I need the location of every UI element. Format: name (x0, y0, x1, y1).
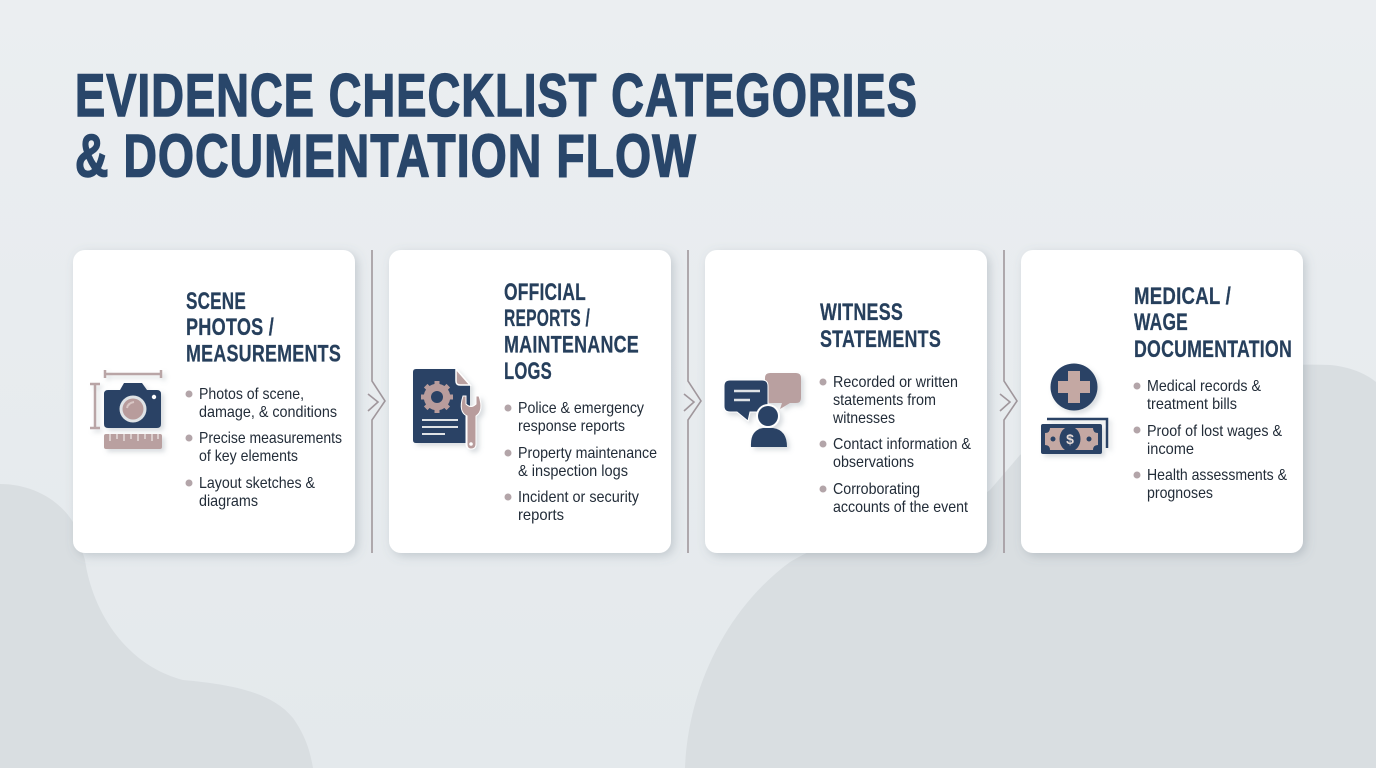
icon: document with gear and wrench (413, 369, 481, 449)
bullet list: & inspection logs (518, 463, 628, 480)
arrow: step 2 to 3 (684, 250, 701, 553)
bullet list (504, 400, 657, 524)
bullet list: Recorded or written (833, 374, 958, 391)
title: & DOCUMENTATION FLOW (75, 122, 697, 190)
heading (186, 288, 341, 368)
arrow: step 3 to 4 (1000, 250, 1017, 553)
bullet list: witnesses (832, 410, 895, 427)
bullet list: observations (833, 454, 914, 471)
arrow: step 1 to 2 (368, 250, 385, 553)
heading (1134, 283, 1292, 363)
heading: SCENE (186, 288, 246, 315)
background blob: lower right (685, 365, 1376, 768)
bullet list (820, 374, 971, 516)
bullet list: Property maintenance (518, 445, 657, 462)
heading: WITNESS (820, 299, 903, 326)
heading: DOCUMENTATION (1134, 336, 1292, 363)
panel: scene photos / measurements (73, 250, 355, 553)
heading: STATEMENTS (820, 326, 941, 353)
bullet list: Health assessments & (1147, 467, 1287, 484)
bullet list: reports (518, 507, 564, 524)
bullet list (1134, 378, 1287, 502)
bullet list: Contact information & (833, 436, 971, 453)
panel: official reports / maintenance logs (389, 250, 671, 553)
bullet list: Layout sketches & (199, 475, 315, 492)
bullet list: of key elements (199, 448, 298, 465)
heading: WAGE (1134, 309, 1188, 336)
heading (820, 299, 941, 353)
title: EVIDENCE CHECKLIST CATEGORIES (75, 62, 918, 129)
heading: MEASUREMENTS (186, 340, 341, 368)
icon: medical cross and money: $ (1066, 431, 1074, 447)
bullet list: statements from (833, 392, 936, 409)
bullet list: prognoses (1147, 485, 1213, 502)
background blob: lower left (0, 484, 313, 768)
icon: medical cross and money (1041, 364, 1107, 454)
bullet list (186, 386, 342, 510)
bullet list: Incident or security (518, 489, 639, 506)
bullet list: income (1147, 441, 1194, 458)
heading (504, 279, 639, 385)
bullet list: Proof of lost wages & (1147, 423, 1282, 440)
bullet list: diagrams (199, 493, 258, 510)
bullet list: accounts of the event (833, 499, 968, 516)
heading: REPORTS / (504, 305, 590, 332)
bullet list: Photos of scene, (199, 386, 304, 403)
bullet list: damage, & conditions (199, 404, 337, 421)
icon: camera with measurements (90, 370, 162, 449)
panel: medical / wage documentation (1021, 250, 1303, 553)
heading: MAINTENANCE (504, 332, 639, 358)
bullet list: treatment bills (1147, 396, 1237, 413)
bullet list: Corroborating (833, 481, 920, 498)
heading: LOGS (504, 358, 552, 385)
bullet list: response reports (518, 418, 625, 435)
bullet list: Police & emergency (518, 400, 644, 417)
heading: PHOTOS / (186, 314, 274, 341)
heading: MEDICAL / (1134, 283, 1231, 310)
title (75, 62, 918, 190)
heading: OFFICIAL (504, 279, 586, 306)
icon: speech bubbles and person (724, 373, 801, 447)
panel: witness statements (705, 250, 987, 553)
bullet list: Precise measurements (199, 430, 342, 447)
bullet list: Medical records & (1147, 378, 1261, 395)
